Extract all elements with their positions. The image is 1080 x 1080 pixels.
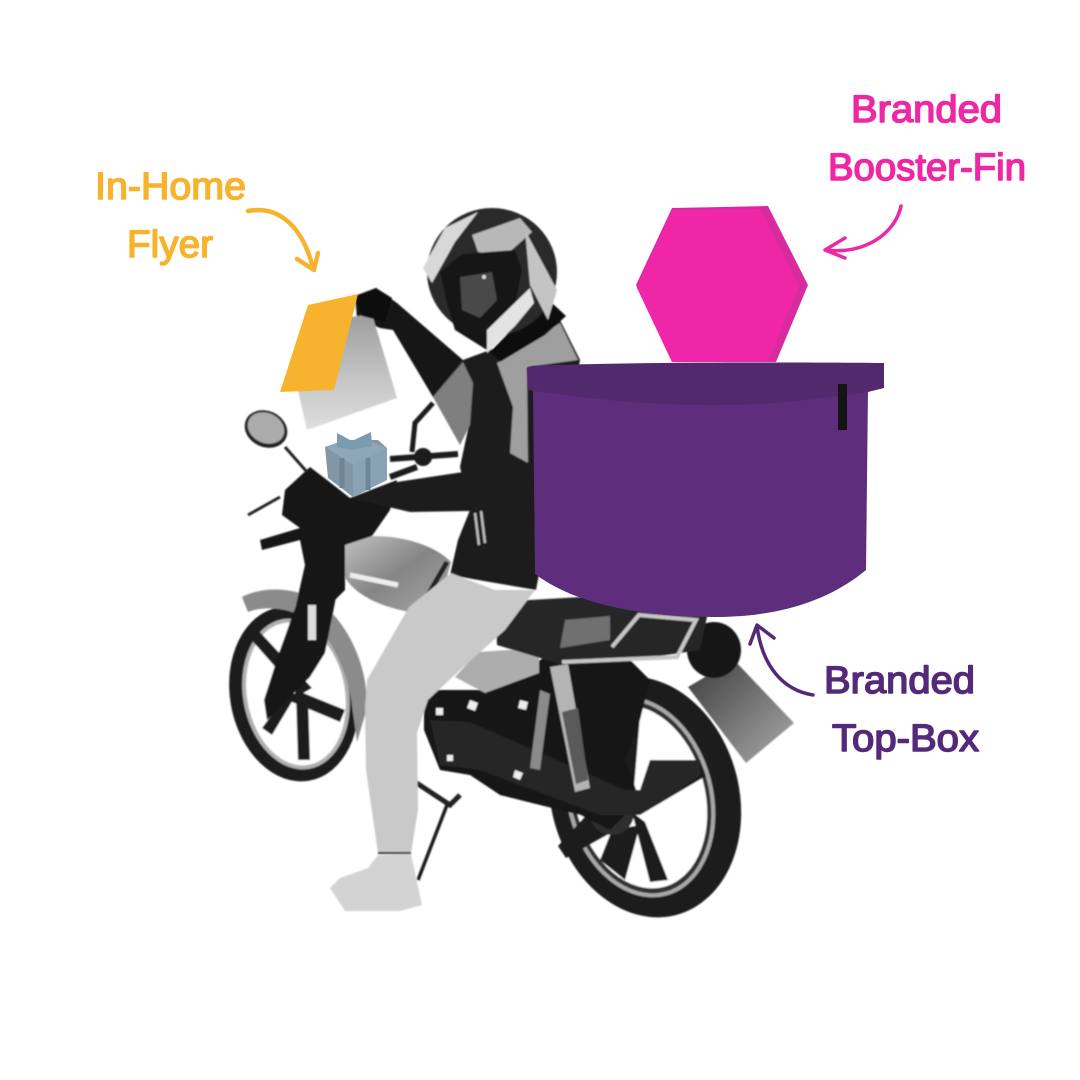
handlebar and controls (260, 467, 397, 605)
arrow: to flyer (248, 210, 318, 270)
seat (495, 596, 708, 664)
label: top-box: Top-Box (832, 718, 979, 760)
rider torso (433, 320, 580, 590)
rider hand (355, 288, 392, 322)
shoe (330, 854, 422, 911)
arrow: to booster fin (825, 206, 901, 258)
kickstand (418, 805, 447, 880)
fuel tank (340, 536, 451, 613)
label: in-home flyer: In-Home (95, 166, 246, 208)
top box zip (838, 384, 847, 430)
front fork (264, 597, 336, 720)
label: booster-fin (828, 89, 1026, 189)
rear wheel (523, 655, 767, 939)
jacket grey panels (497, 323, 578, 463)
ankle band (378, 852, 411, 854)
in-home flyer (280, 294, 358, 392)
tail lamp (687, 622, 741, 678)
gift box (325, 432, 387, 497)
rider leg (365, 573, 535, 853)
mirror (238, 403, 307, 472)
top box body (533, 390, 868, 617)
license plate (688, 660, 794, 763)
label: booster-fin: Branded (851, 89, 1002, 131)
label: booster-fin: Booster-Fin (828, 147, 1026, 189)
rider helmet (423, 208, 557, 353)
side cover (455, 648, 539, 693)
label: in-home flyer: Flyer (127, 224, 213, 266)
booster fin side (636, 206, 808, 362)
arrow: to top box (750, 625, 813, 695)
label: in-home flyer (95, 166, 246, 266)
engine and swingarm (424, 650, 650, 830)
label: top-box (824, 660, 979, 760)
booster fin face (637, 209, 799, 362)
paper bag (298, 314, 397, 430)
jacket stripes (475, 511, 485, 545)
motorcycle and rider photo (216, 208, 794, 939)
rider collar (490, 303, 566, 362)
rider raised arm (355, 288, 463, 397)
label: top-box: Branded (824, 660, 975, 702)
front fender (242, 589, 367, 742)
rear shock absorber (550, 664, 590, 792)
front wheel (216, 596, 372, 792)
top box lid (527, 362, 884, 405)
chrome rail (562, 615, 696, 662)
rider lower arm (350, 462, 530, 512)
